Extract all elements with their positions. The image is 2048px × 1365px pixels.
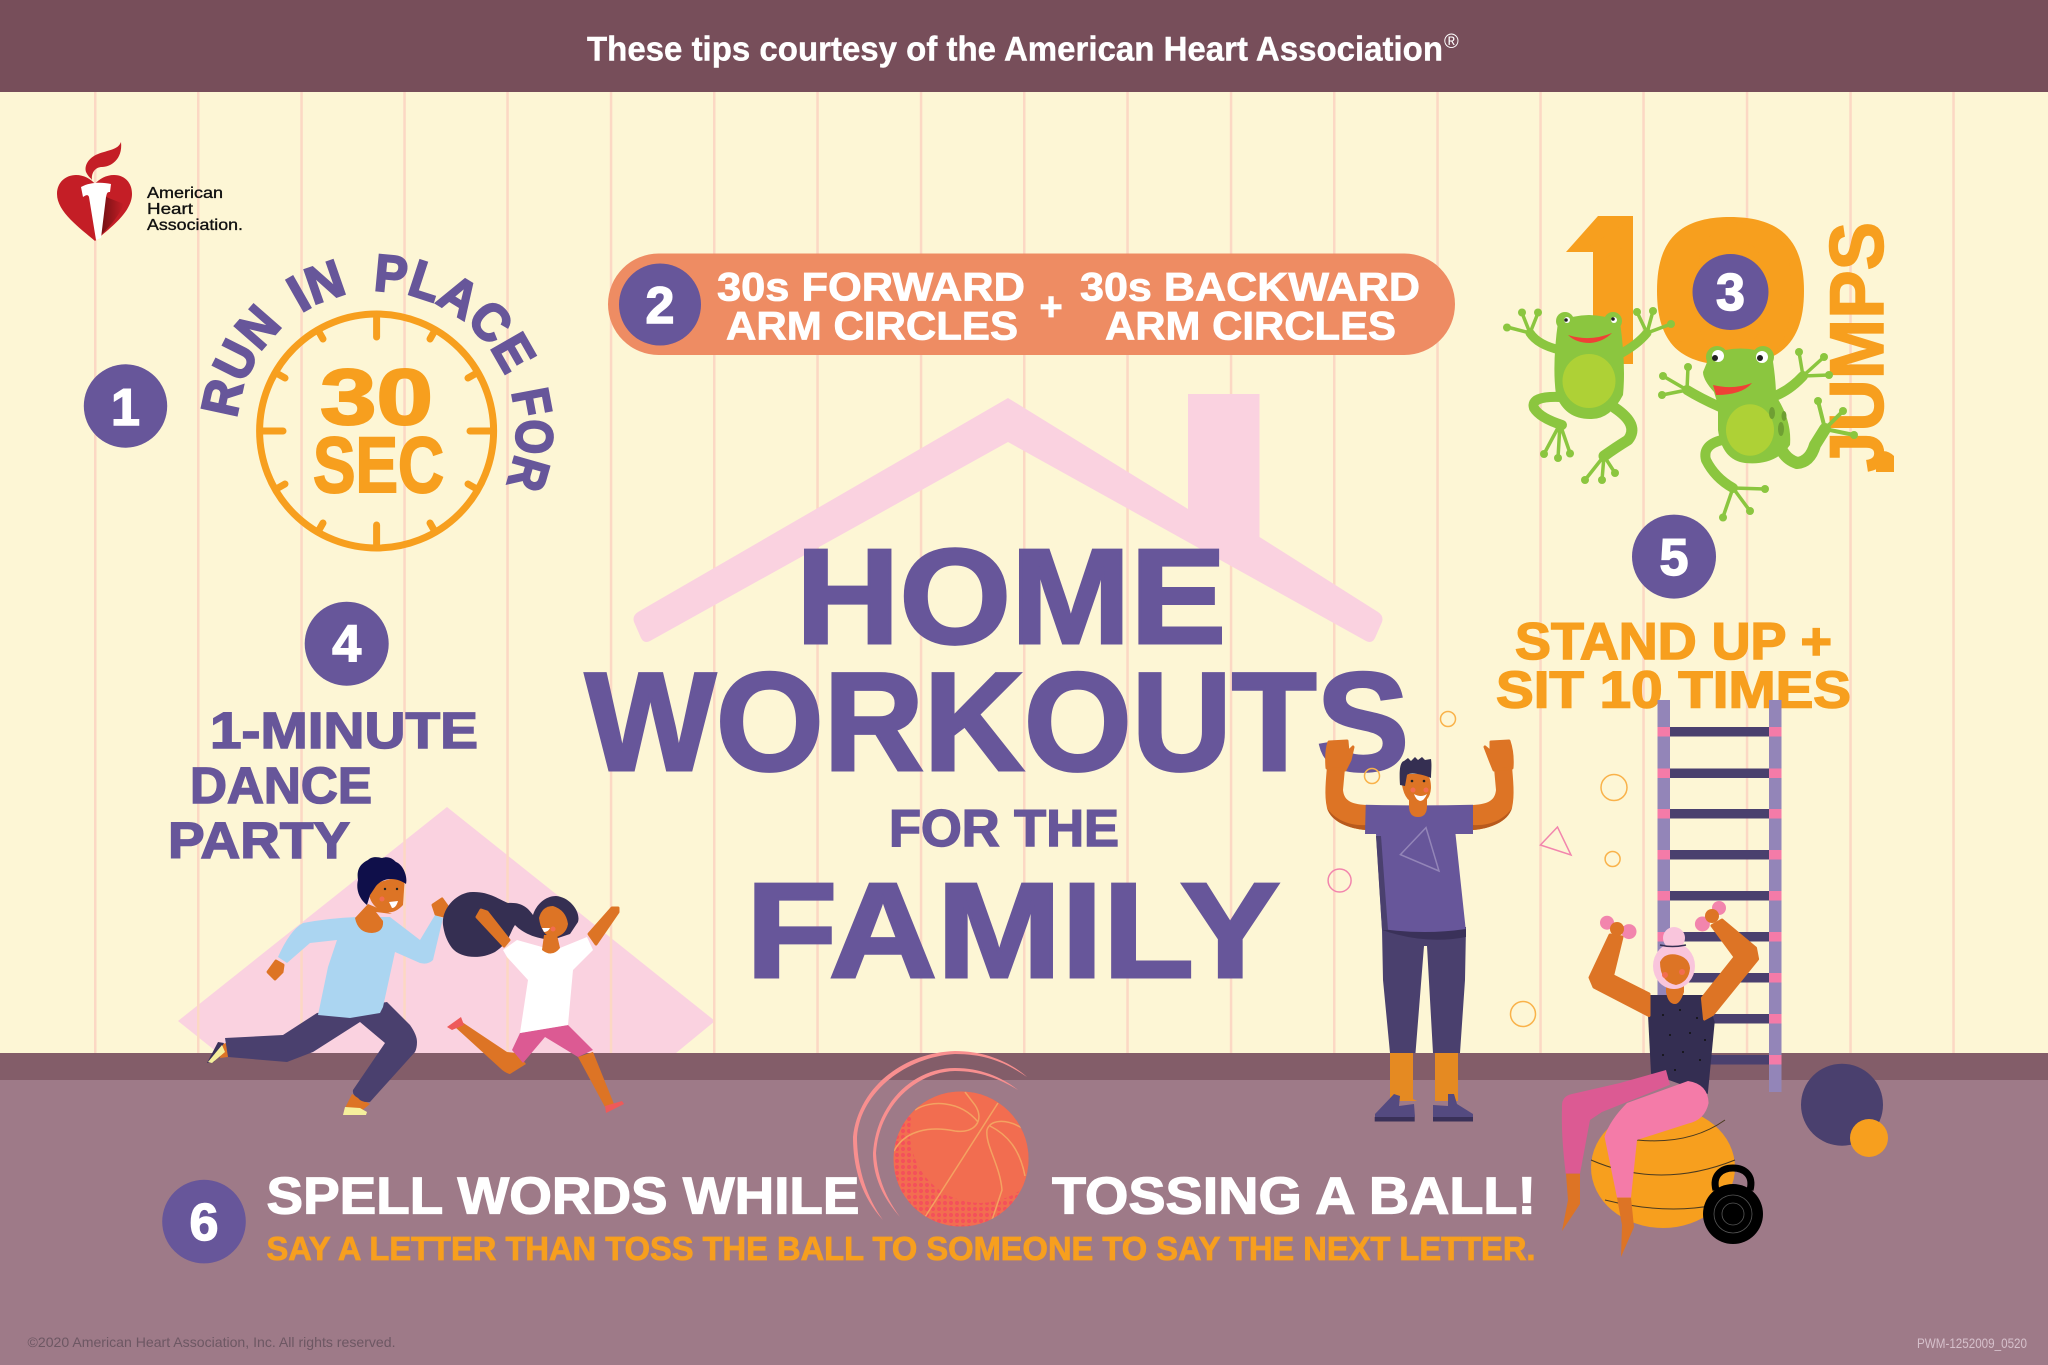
title: FAMILY <box>746 855 1280 1006</box>
step 2 pill: + <box>1039 285 1063 329</box>
step 2 pill: 2 <box>646 277 674 335</box>
title: HOME <box>796 521 1226 672</box>
step 6 subtext: SAY A LETTER THAN TOSS THE BALL TO SOMEONE TO SAY THE NEXT LETTER. <box>266 1230 1536 1267</box>
step 1 badge <box>84 364 167 448</box>
icon: basketball <box>853 1051 1028 1226</box>
step 3: 10 jumps numeral: 10 <box>1575 182 1800 405</box>
title: WORKOUTS <box>585 643 1409 800</box>
decorative bubbles <box>1328 712 1627 1026</box>
copyright: ©2020 American Heart Association, Inc. All rights reserved. <box>28 1334 396 1350</box>
job code: PWM-1252009_0520 <box>1917 1335 2027 1351</box>
stopwatch: 30 sec: SEC <box>313 420 444 509</box>
step 6 heading: SPELL WORDS WHILE <box>266 1168 860 1226</box>
step 4 label <box>168 702 478 869</box>
logo: American Heart Association: Heart <box>147 201 194 218</box>
step 4 badge: 4 <box>332 616 361 674</box>
step 5 badge <box>1632 515 1716 599</box>
step 1 badge: 1 <box>111 379 140 437</box>
step 2 pill <box>608 254 1455 355</box>
step 5 badge: 5 <box>1660 529 1688 587</box>
step 1 curved heading: IN <box>285 258 346 313</box>
house outline <box>634 394 1382 642</box>
step 4 label: DANCE <box>190 757 372 814</box>
step 4 badge <box>305 602 389 686</box>
step 2 pill: ARM CIRCLES <box>1105 304 1396 348</box>
icon: frog right <box>1658 346 1858 522</box>
step 2 pill: 30s BACKWARD <box>1080 266 1420 310</box>
step 4 label: PARTY <box>168 812 350 869</box>
floor balls <box>1801 1064 1888 1157</box>
person: standing man <box>1325 741 1514 1122</box>
icon: kettlebell <box>1703 1168 1763 1244</box>
step 5 label <box>1496 613 1851 720</box>
step 1 curved heading: FOR <box>506 387 554 490</box>
baseboard <box>0 1053 2048 1080</box>
step 6 badge: 6 <box>190 1194 218 1252</box>
icon: frog left <box>1503 307 1675 484</box>
logo: American Heart Association <box>57 142 243 241</box>
top banner <box>0 0 2048 92</box>
top banner: ® <box>1444 31 1459 53</box>
step 5 label: STAND UP + <box>1515 613 1832 671</box>
person: running boy <box>207 857 447 1115</box>
logo: American Heart Association: Association. <box>147 217 243 234</box>
step 4 label: 1-MINUTE <box>210 702 478 759</box>
stopwatch: 30 sec <box>260 314 494 548</box>
step 2 pill: ARM CIRCLES <box>726 304 1018 348</box>
person: woman on exercise ball <box>1562 901 1758 1257</box>
step 3: JUMPS label: JUMPS <box>1815 222 1900 472</box>
step 5 label: SIT 10 TIMES <box>1496 662 1851 720</box>
step 6 badge <box>162 1180 246 1263</box>
floor <box>0 1080 2048 1365</box>
step 2 pill: 30s FORWARD <box>717 266 1025 310</box>
step 1 curved heading: PLACE <box>375 254 538 376</box>
logo: American Heart Association: American <box>147 185 223 202</box>
wall ladder <box>1658 700 1782 1092</box>
person: running girl <box>443 892 624 1113</box>
step 1 curved heading <box>200 254 554 490</box>
title: FOR THE <box>889 800 1119 858</box>
title <box>585 521 1409 1006</box>
step 1 curved heading: RUN <box>200 303 282 417</box>
step 6 heading <box>266 1168 1536 1226</box>
step 3: 10 jumps numeral: 3 <box>1716 264 1745 322</box>
step 6 heading: TOSSING A BALL! <box>1052 1168 1536 1226</box>
top banner: These tips courtesy of the American Heart Association <box>587 30 1443 68</box>
step 3: 10 jumps numeral <box>1566 216 1804 364</box>
stopwatch: 30 sec: 30 <box>320 352 433 441</box>
pink triangle backdrop <box>178 807 715 1053</box>
